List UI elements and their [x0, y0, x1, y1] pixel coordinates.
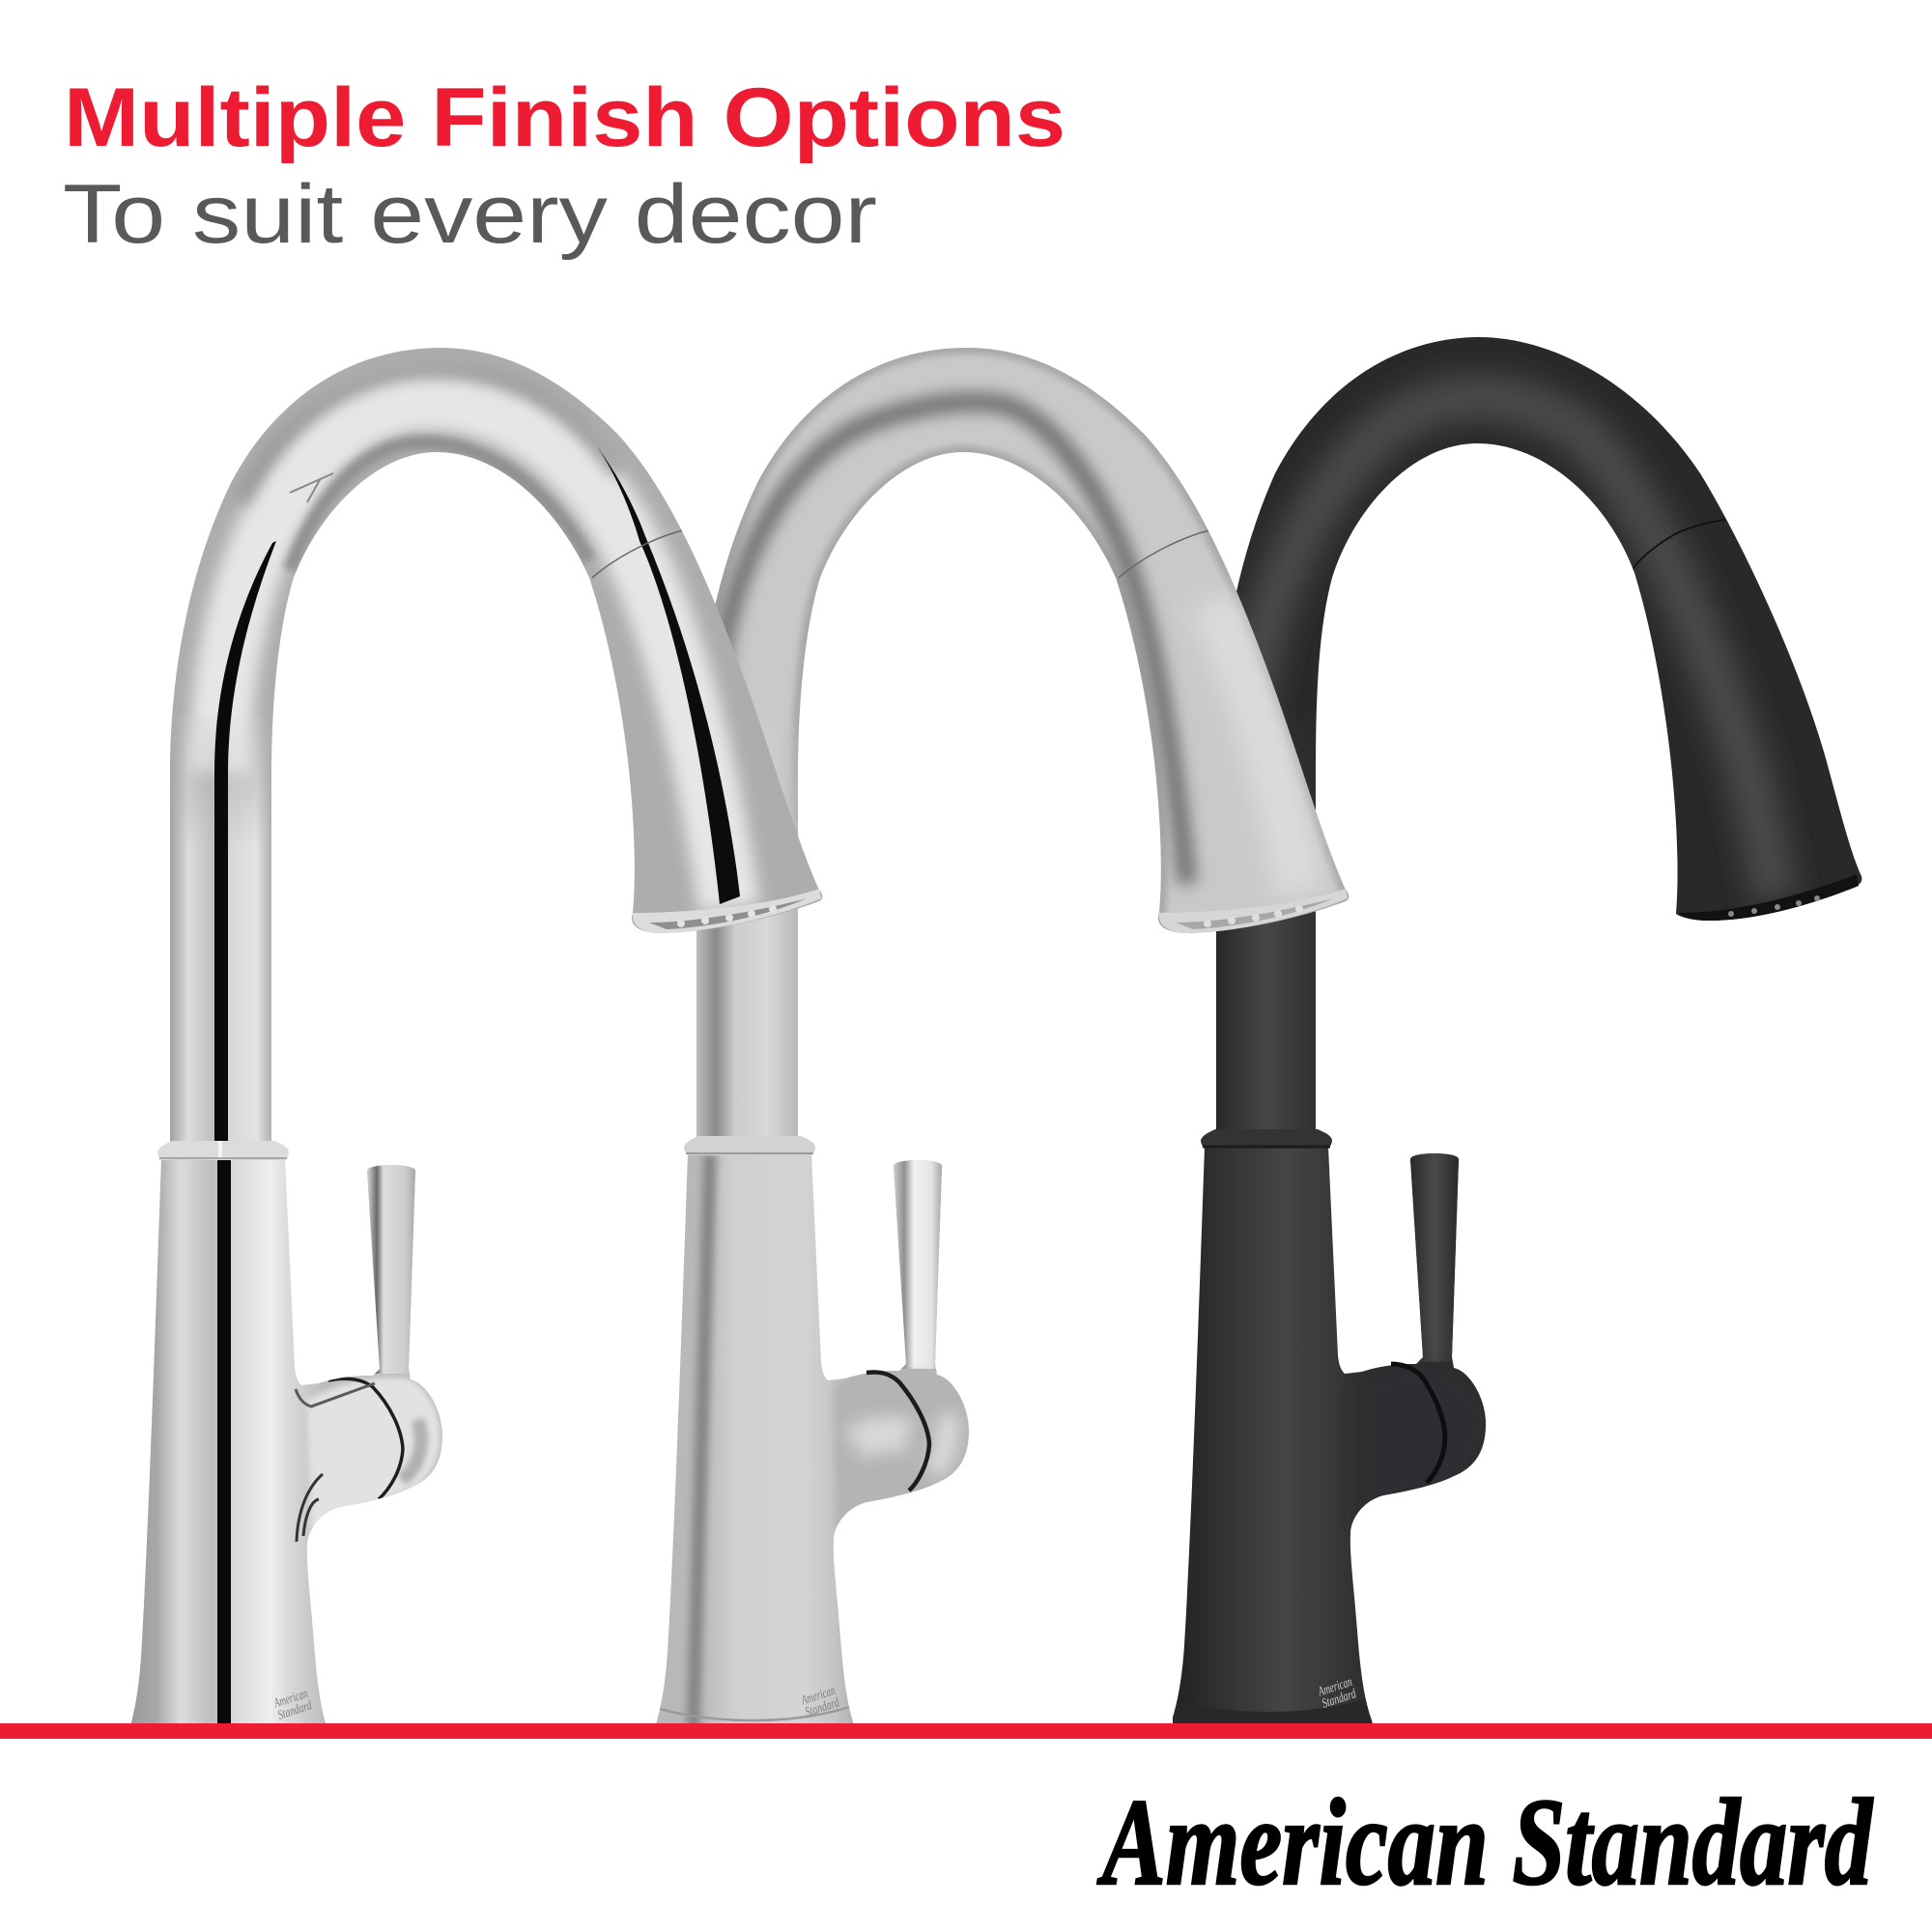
small base logo: American — [799, 1684, 838, 1709]
faucet: polished chrome finish — [129, 348, 822, 1748]
title: Multiple Finish Options — [64, 71, 1065, 164]
small base logo — [799, 1684, 841, 1720]
brushed spout and stem — [696, 348, 1349, 1159]
small base logo: American — [1316, 1675, 1354, 1700]
faucet: brushed nickel finish — [647, 348, 1349, 1744]
footer background — [0, 1739, 1932, 1932]
chrome spout and stem — [170, 348, 822, 1159]
brushed spray head — [1159, 889, 1348, 933]
black spray head — [1679, 874, 1859, 921]
small base logo — [1316, 1675, 1358, 1712]
small base logo: American — [271, 1687, 310, 1712]
subtitle: To suit every decor — [63, 168, 877, 261]
chrome base body with handle — [129, 1158, 442, 1748]
brushed collar — [684, 1136, 815, 1155]
chrome spray head — [633, 889, 821, 933]
small base logo: Standard — [276, 1698, 314, 1723]
black base body with handle — [1173, 1148, 1486, 1723]
black spout and stem — [1216, 337, 1861, 1159]
brushed base body with handle — [647, 1153, 969, 1744]
small base logo: Standard — [1321, 1687, 1358, 1712]
chrome collar — [157, 1141, 289, 1160]
black collar — [1201, 1129, 1332, 1149]
faucet: matte black finish — [1159, 337, 1861, 1747]
small base logo — [271, 1687, 314, 1723]
small base logo: Standard — [804, 1695, 841, 1720]
red baseline band — [0, 1723, 1932, 1739]
